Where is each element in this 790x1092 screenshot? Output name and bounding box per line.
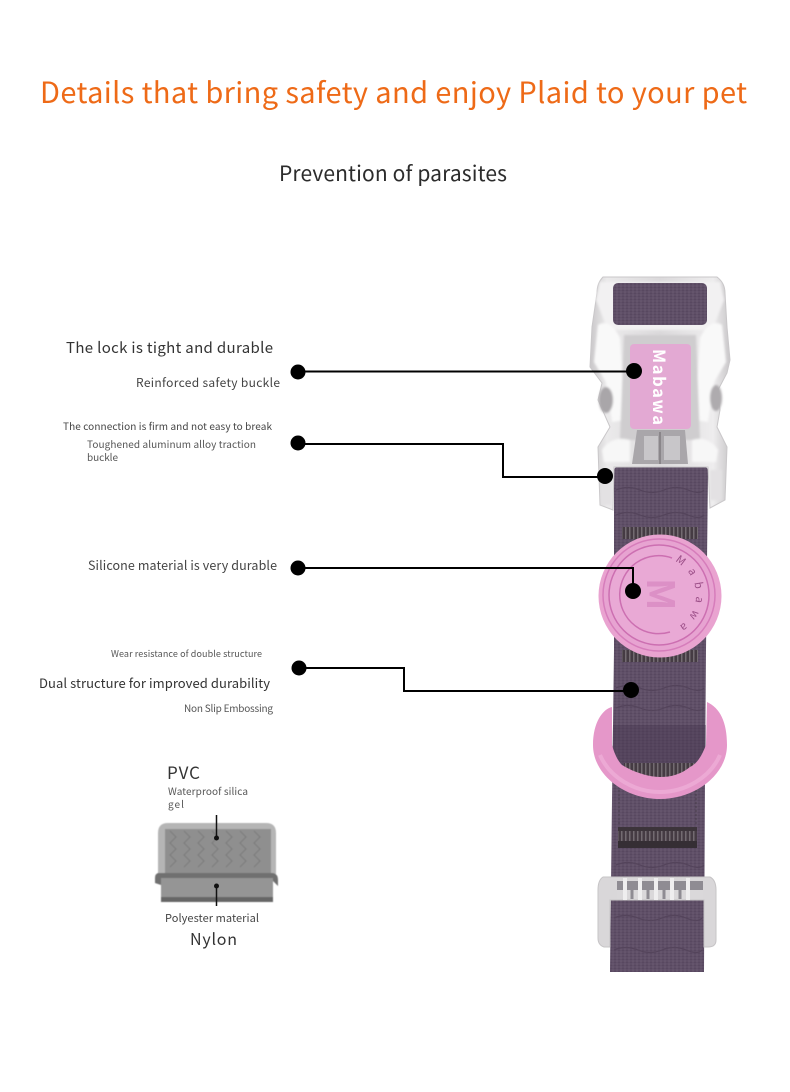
callout: dual structure: Wear resistance of double structure [111,647,262,660]
buckle translucent shading [594,282,726,505]
lower keeper loop [598,877,716,947]
polyester label: Polyester material [165,910,259,926]
D ring [593,702,727,799]
callout: aluminum traction buckle [63,418,613,484]
callout: aluminum traction buckle: Toughened aluminum alloy traction [87,436,256,451]
product: pet collar [590,276,730,972]
strap wave lines [614,488,704,952]
callout: aluminum traction buckle: buckle [87,449,118,464]
top pointer [216,815,218,838]
callout: dual structure: Non Slip Embossing [184,700,273,715]
strap shading near ring [612,725,706,780]
clear side-release buckle [590,277,730,510]
callout: reinforced safety buckle: The lock is tight and durable [66,337,273,358]
callout: reinforced safety buckle: Reinforced safety buckle [136,374,280,391]
callout: dual structure: Dual structure for improved durability [39,673,270,692]
silicone coin [598,534,722,658]
D ring highlight [600,755,720,792]
callout: silicone material [88,555,641,599]
pink label [630,344,691,429]
coin curved brand text: Mabawa [676,555,704,630]
title: Details that bring safety and enjoy Plaid to your pet [40,70,747,112]
bottom pointer [216,886,218,906]
subtitle: Prevention of parasites [279,158,507,188]
callout: reinforced safety buckle [66,337,642,391]
brand text on label: Mabawa [648,349,672,425]
stitched elastic bands [618,527,698,848]
cross-section block [155,823,278,902]
coin inner arc [620,556,672,634]
material cross-section diagram [155,759,278,950]
buckle upper window with strap [613,283,707,325]
PVC label: PVC [167,759,200,784]
callout: silicone material: Silicone material is very durable [88,555,277,574]
waterproof silica gel label: Waterproof silica [168,783,248,798]
callout: dual structure [39,647,639,715]
buckle centre clip [632,430,688,464]
strap [610,467,708,972]
material cross-section diagram: gel [168,796,184,811]
keeper ridges [617,878,703,900]
coin logo: M [636,578,691,610]
nylon label: Nylon [190,926,237,950]
callout: aluminum traction buckle: The connection is firm and not easy to break [63,418,272,433]
